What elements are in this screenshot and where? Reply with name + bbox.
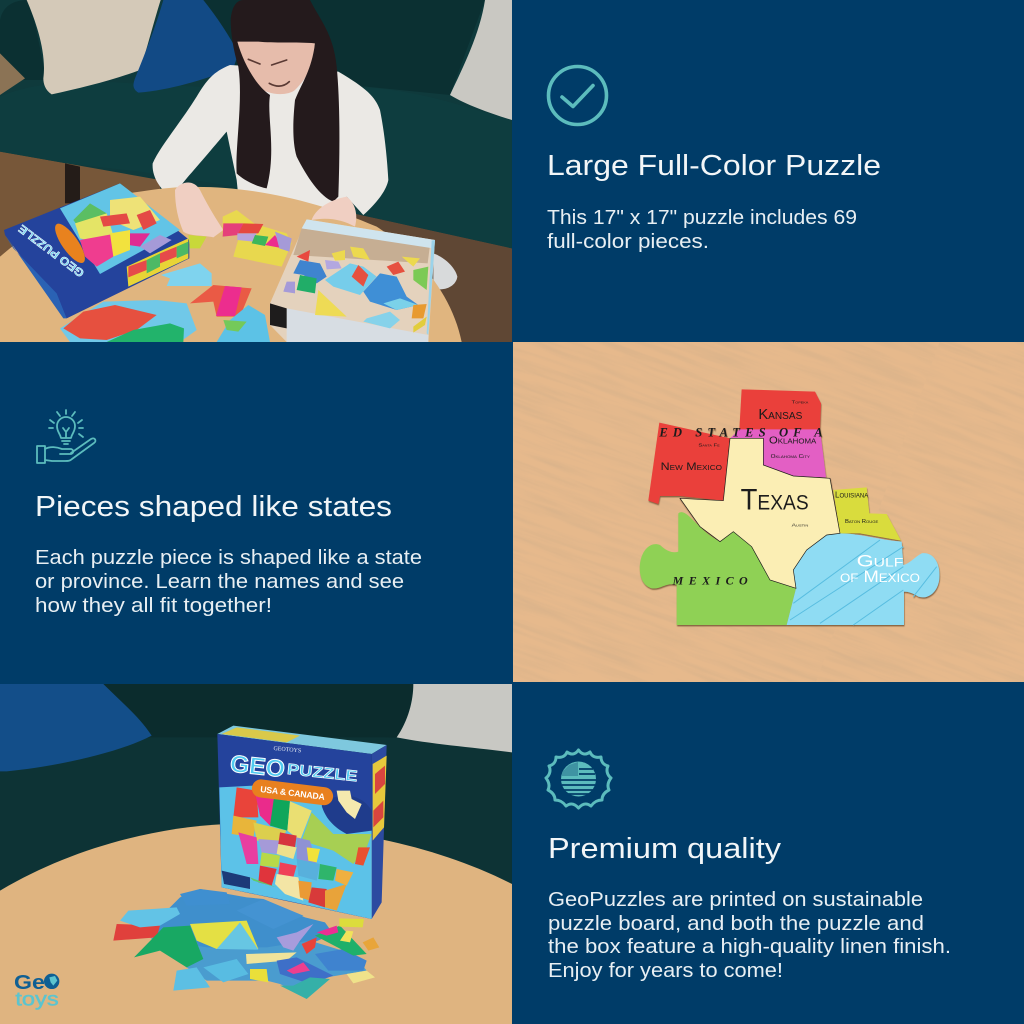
icon: check mark in circle bbox=[548, 66, 606, 124]
pillow: beige bbox=[27, 0, 161, 94]
state labels: Gulf bbox=[857, 552, 903, 571]
open box with pieces bbox=[270, 219, 435, 342]
body text: This 17" x 17" puzzle includes 69 bbox=[547, 206, 857, 229]
Kansas bbox=[739, 389, 821, 430]
New Mexico bbox=[648, 423, 730, 504]
orange banner bbox=[55, 224, 85, 263]
state labels: MEXICO bbox=[672, 573, 748, 587]
body text: puzzle board, and both the puzzle and bbox=[548, 912, 924, 935]
state labels: Topeka bbox=[792, 399, 808, 404]
puzzle box: PUZZLE bbox=[286, 761, 358, 785]
panel: photo of woman assembling puzzle bbox=[0, 0, 512, 342]
body text: the box feature a high-quality linen finish. bbox=[548, 935, 951, 958]
assembled pieces on table bbox=[60, 210, 292, 342]
pillow: blue bbox=[134, 0, 238, 93]
Oklahoma bbox=[730, 429, 826, 477]
state labels: Oklahoma bbox=[769, 435, 817, 446]
Gulf stripes bbox=[790, 540, 937, 625]
hair bbox=[231, 0, 339, 202]
loose puzzle pieces bbox=[113, 889, 379, 999]
box side colored bbox=[127, 238, 188, 287]
state labels: Kansas bbox=[758, 407, 803, 423]
state labels: Oklahoma City bbox=[771, 454, 810, 460]
map on box bbox=[219, 786, 372, 919]
map pieces bbox=[640, 389, 939, 625]
body text: Each puzzle piece is shaped like a state bbox=[35, 546, 422, 569]
state labels: ED STATES OF A bbox=[658, 426, 823, 440]
box lid with map bbox=[4, 183, 189, 318]
wood background bbox=[513, 342, 1024, 682]
face bbox=[237, 36, 315, 94]
panel: large full-color puzzle bbox=[547, 66, 881, 253]
icon: light bulb over hand bbox=[37, 410, 95, 463]
sneaker bbox=[433, 253, 457, 289]
body text bbox=[548, 888, 951, 982]
facial features bbox=[248, 59, 289, 86]
logo: Geo toys: toys bbox=[15, 990, 59, 1011]
logo: Geo toys bbox=[14, 971, 59, 1011]
panel: pieces shaped like states bbox=[35, 410, 422, 617]
orange banner: USA & CANADA bbox=[260, 784, 326, 802]
panel: photo of boxed puzzle on table bbox=[0, 684, 512, 1024]
puzzle box bbox=[217, 726, 387, 919]
box title: GEO bbox=[229, 750, 286, 783]
pillow: grey bbox=[397, 684, 512, 752]
body text bbox=[35, 546, 422, 617]
sweater bbox=[153, 65, 388, 215]
Texas bbox=[680, 438, 840, 588]
box brand: GEOTOYS bbox=[273, 746, 301, 754]
heading: Premium quality bbox=[548, 833, 782, 865]
panel: premium quality bbox=[546, 750, 951, 982]
orange banner bbox=[251, 778, 334, 806]
table top bbox=[0, 187, 462, 342]
body text bbox=[547, 206, 857, 253]
body text: Enjoy for years to come! bbox=[548, 959, 783, 982]
panel: Texas puzzle pieces on wood bbox=[513, 342, 1024, 682]
heading: Pieces shaped like states bbox=[35, 491, 392, 523]
box title: GEO PUZZLE bbox=[16, 222, 87, 279]
hands bbox=[175, 182, 356, 237]
state labels: Louisiana bbox=[835, 491, 868, 500]
state labels bbox=[658, 399, 920, 587]
pillow: grey bbox=[450, 0, 512, 120]
state labels: Baton Rouge bbox=[845, 519, 879, 525]
woman bbox=[153, 0, 388, 215]
Mexico bbox=[640, 512, 796, 625]
state labels: of Mexico bbox=[840, 567, 920, 586]
heading: Large Full-Color Puzzle bbox=[547, 150, 881, 182]
body text: how they all fit together! bbox=[35, 594, 272, 617]
table top bbox=[0, 824, 512, 1024]
logo: Geo toys: Geo bbox=[14, 971, 59, 994]
state labels: New Mexico bbox=[661, 461, 723, 473]
state labels: Austin bbox=[792, 523, 808, 528]
body text: or province. Learn the names and see bbox=[35, 570, 404, 593]
body text: GeoPuzzles are printed on sustainable bbox=[548, 888, 923, 911]
map inset circle bbox=[322, 796, 372, 834]
icon: badge with US flag bbox=[546, 750, 611, 808]
body text: full-color pieces. bbox=[547, 230, 709, 253]
state labels: Texas bbox=[741, 484, 809, 517]
state labels: Santa Fe bbox=[698, 442, 720, 448]
Gulf of Mexico bbox=[787, 533, 939, 625]
pillow: blue bbox=[0, 684, 152, 771]
Louisiana bbox=[833, 487, 901, 541]
